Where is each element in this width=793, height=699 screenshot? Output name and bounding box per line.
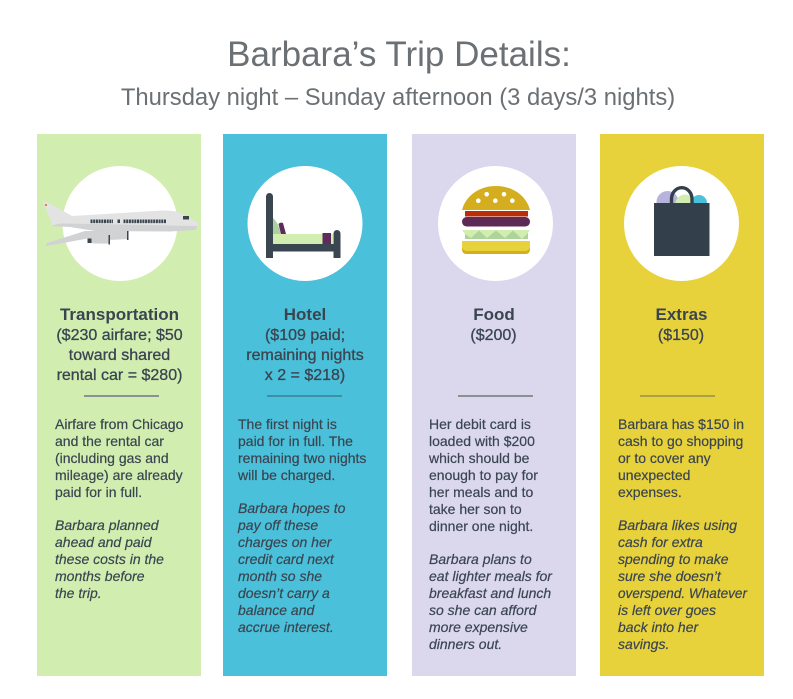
body text: expenses. [618,484,682,500]
italic note: savings. [618,636,669,652]
body text: unexpected [618,467,690,483]
cost details: ($109 paid; [265,327,345,344]
icon: burger [438,166,553,281]
italic note: sure she doesn’t [618,568,722,584]
italic note: balance and [238,602,316,618]
italic note: Barbara hopes to [238,500,346,516]
italic note: ahead and paid [55,534,153,550]
italic note: Barbara plans to [429,551,532,567]
body text: will be charged. [237,467,335,483]
cost details [246,327,364,384]
cost: ($200) [470,327,517,344]
italic note: pay off these [237,517,318,533]
body text: cash to go shopping [618,433,743,449]
italic note: so she can afford [429,602,538,618]
italic note [618,517,748,652]
body text: or to cover any [618,450,711,466]
heading: food: Food [473,305,515,324]
italic note: months before [55,568,145,584]
italic note: eat lighter meals for [429,568,553,584]
body text: dinner one night. [429,518,533,534]
panel: hotel [223,134,387,676]
italic note: charges on her [238,534,333,550]
italic note: the trip. [55,585,102,601]
title: Barbara’s Trip Details: [227,35,571,74]
panel: food [412,134,576,676]
italic note: is left over goes [618,602,716,618]
cost details: toward shared [69,347,170,364]
heading: transportation: Transportation [60,305,179,324]
cost details: remaining nights [246,347,364,364]
italic note: Barbara likes using [618,517,737,533]
body text: which should be [428,450,530,466]
body text: enough to pay for [429,467,538,483]
body text [237,416,366,483]
body text: remaining two nights [238,450,366,466]
body text: (including gas and [55,450,169,466]
body text: mileage) are already [55,467,183,483]
cost: ($150) [658,327,704,344]
italic note: accrue interest. [238,619,334,635]
body text: The first night is [238,416,337,432]
italic note [429,551,553,652]
cost details: ($230 airfare; $50 [56,327,183,344]
body text [618,416,744,500]
heading: extras: Extras [656,305,707,324]
body text [428,416,538,534]
body text: Barbara has $150 in [618,416,744,432]
italic note: dinners out. [429,636,502,652]
body text: loaded with $200 [429,433,535,449]
body text: Her debit card is [429,416,531,432]
panel: transportation [37,134,201,676]
body text: paid for in full. [55,484,142,500]
cost details: x 2 = $218) [265,367,345,384]
italic note: spending to make [618,551,729,567]
cost details: rental car = $280) [57,367,182,384]
heading: hotel: Hotel [284,305,326,324]
italic note: Barbara planned [55,517,160,533]
italic note: these costs in the [55,551,164,567]
body text: paid for in full. The [238,433,353,449]
italic note: back into her [618,619,699,635]
cost details [56,327,183,384]
icon: bed [248,166,362,281]
subtitle: Thursday night – Sunday afternoon (3 days/3 nights) [121,84,675,111]
italic note: more expensive [429,619,528,635]
icon: shopping bag [624,166,739,281]
body text [55,416,184,500]
italic note [55,517,164,601]
italic note [237,500,346,635]
body text: her meals and to [429,484,533,500]
italic note: overspend. Whatever [618,585,748,601]
italic note: breakfast and lunch [429,585,551,601]
italic note: month so she [238,568,322,584]
body text: take her son to [429,501,522,517]
panel: extras [600,134,764,676]
body text: Airfare from Chicago [55,416,184,432]
icon: airplane [43,166,198,281]
italic note: cash for extra [618,534,703,550]
italic note: credit card next [238,551,335,567]
body text: and the rental car [55,433,164,449]
italic note: doesn’t carry a [238,585,330,601]
